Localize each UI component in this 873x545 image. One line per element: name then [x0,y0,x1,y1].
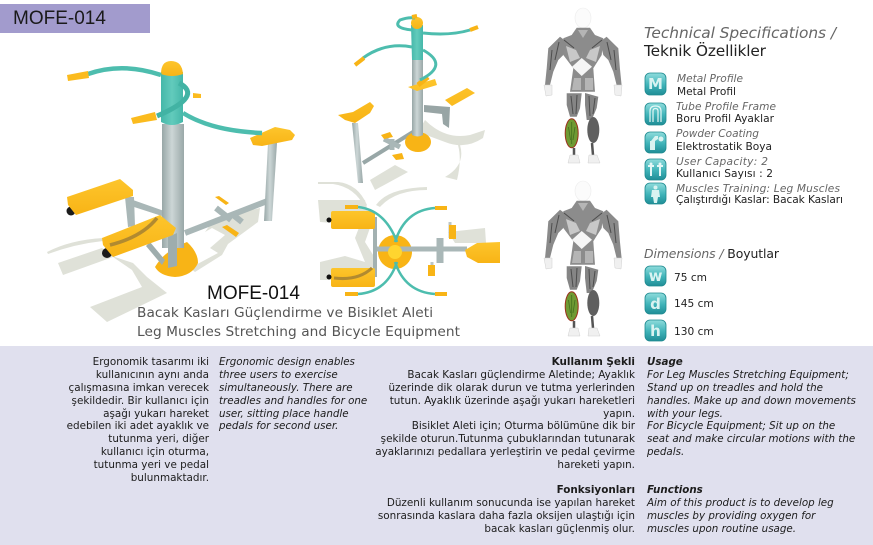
title badge [0,4,150,33]
teal collar [161,72,183,125]
dimensions list [645,266,714,341]
usage and functions text: Turkish: Fonksiyonları [557,484,635,496]
lower treadle [102,215,176,257]
ground shadow [47,208,260,322]
rear bar and pedal crank [185,200,270,233]
description text: English: Ergonomic design enables [219,356,356,368]
spec: tube frame: Tube Profile Frame [676,101,776,113]
usage and functions text: Turkish: Bisiklet Aleti için; Oturma bölümüne dik bir [412,420,636,432]
muscle diagram: upper [544,8,622,163]
usage and functions text: Turkish: şekilde oturun.Tutunma çubuklarından tutunarak [381,433,635,445]
product name: Leg Muscles Stretching and Bicycle Equipment [137,324,461,340]
icon: tube frame [645,103,666,125]
description text: English: simultaneously. There are [219,382,353,394]
usage and functions text: English: Stand up on treadles and hold the [647,382,823,394]
handle grips [67,71,201,124]
description text: Turkish: çalışmasına imkan verecek [68,382,209,394]
spec: powder coating: Powder Coating [676,128,759,140]
usage and functions text: Turkish: tutun. Ayaklık üzerinde aşağı yukarı hareketleri [390,395,635,407]
product name [137,305,461,340]
usage and functions text: Turkish: Kullanım Şekli [552,356,635,368]
icon: user capacity [645,159,666,180]
usage and functions text: English: seat and make circular motions with the [647,433,855,445]
usage and functions text: Turkish: üzerinde dik olarak durun ve tutma yerlerinden [388,382,635,394]
heading: technical specifications [643,24,838,60]
usage and functions text: Turkish: Düzenli kullanım sonucunda ise yapılan hareket [387,497,635,509]
product name: Bacak Kasları Güçlendirme ve Bisiklet Aleti [137,305,433,321]
usage and functions text: Turkish: yapın. [603,408,635,420]
description text: Turkish: aşağı yukarı hareket [103,408,209,420]
spec: tube frame: Boru Profil Ayaklar [676,113,775,125]
lower treadle frame [146,233,177,268]
handle bars [88,68,161,75]
usage and functions text: English: pedals. [646,446,684,458]
usage and functions text: Turkish: sonrasında kaslara daha fazla oksijen ulaştığı için [378,510,635,522]
usage and functions text: Turkish [375,356,636,535]
upper treadle with frame [125,197,167,227]
spec: metal profile: Metal Profil [677,86,736,98]
spec: user capacity [676,156,773,180]
spec: muscles [676,183,843,206]
description panel [0,346,873,545]
icon: muscles [645,183,666,204]
usage and functions text: English: For Bicycle Equipment; Sit up on the [647,420,835,432]
dimension: height: 130 cm [674,326,714,338]
description text: Turkish: bulunmaktadır. [131,472,209,484]
spec: powder coating: Elektrostatik Boya [676,141,772,153]
usage and functions text: Turkish: hareketi yapın. [557,459,635,471]
icon: powder coating [645,132,666,153]
spec: powder coating [676,128,772,153]
dimension: depth: d [650,295,661,313]
description text: English: treadles and handles for one [219,395,367,407]
usage and functions text: Turkish: bacak kasları güçlenmiş olur. [484,523,635,535]
base dome [155,242,198,277]
spec: metal profile: Metal Profile [677,73,743,85]
usage and functions text: English [646,356,856,535]
usage and functions text: English: handles. Make up and down movements [647,395,856,407]
description text: English: pedals for second user. [218,420,338,432]
description text: Turkish: Ergonomik tasarımı iki [93,356,209,368]
description text: Turkish [67,356,210,484]
dimension: width [645,266,707,286]
heading: technical specifications: Teknik Özellikler [643,41,767,60]
spec: user capacity: User Capacity: 2 [676,156,768,168]
usage and functions text: Turkish: Bacak Kasları güçlendirme Aletinde; Ayaklık [407,369,635,381]
top view of equipment, angled [338,16,485,190]
description text: English [218,356,367,432]
spec: muscles: Çalıştırdığı Kaslar: Bacak Kasları [676,194,843,206]
heading: technical specifications: Technical Specifications / [644,24,838,42]
description text: English: user, sitting place handle [219,408,349,420]
pole [162,124,184,248]
usage and functions text: English: Usage [647,356,683,368]
icon: metal profile [645,73,666,95]
main equipment illustration [47,61,295,322]
spec: tube frame [676,101,776,125]
description text: Turkish: tutunma yeri ve pedal [94,459,209,471]
seat [250,127,295,146]
usage and functions text: English: with your legs. [647,408,723,420]
dimension: height: h [650,322,661,340]
plan view of equipment [318,182,500,294]
spec: user capacity: Kullanıcı Sayısı : 2 [676,168,773,180]
usage and functions text: English: muscles by providing oxygen for [647,510,816,522]
usage and functions text: English: For Leg Muscles Stretching Equipment; [647,369,849,381]
heading: dimensions: Dimensions / Boyutlar [644,246,780,261]
spec: metal profile [677,73,743,98]
spec: muscles: Muscles Training: Leg Muscles [676,183,840,195]
specifications list [645,73,843,206]
usage and functions text: English: Aim of this product is to develop leg [646,497,834,509]
usage and functions text: English: muscles upon routine usage. [647,523,796,535]
title badge: MOFE-014 [13,8,106,29]
muscle diagram: lower [544,181,622,336]
dimension: depth: 145 cm [674,298,714,310]
dimension: width: w [649,267,663,285]
icon: metal profile: M [648,75,663,93]
dimension: width: 75 cm [674,272,707,284]
description text: Turkish: kullanıcının aynı anda [96,369,209,381]
description text: English: three users to exercise [219,369,338,381]
product code: MOFE-014 [207,283,300,304]
description text: Turkish: kullanıcı için oturma, [101,446,209,458]
shadow [370,120,485,190]
dimension: depth [645,293,714,314]
description text: Turkish: edebilen iki adet ayaklık ve [67,420,209,432]
dome cap [161,61,183,76]
usage and functions text: English: Functions [647,484,703,496]
description text: Turkish: şekildedir. Bir kullanıcı için [72,395,209,407]
usage and functions text: Turkish: ayaklarınızı pedallara yerleştirin ve pedal çevirme [375,446,635,458]
description text: Turkish: tutunma yeri, diğer [108,433,210,445]
dimension: height [645,320,714,341]
